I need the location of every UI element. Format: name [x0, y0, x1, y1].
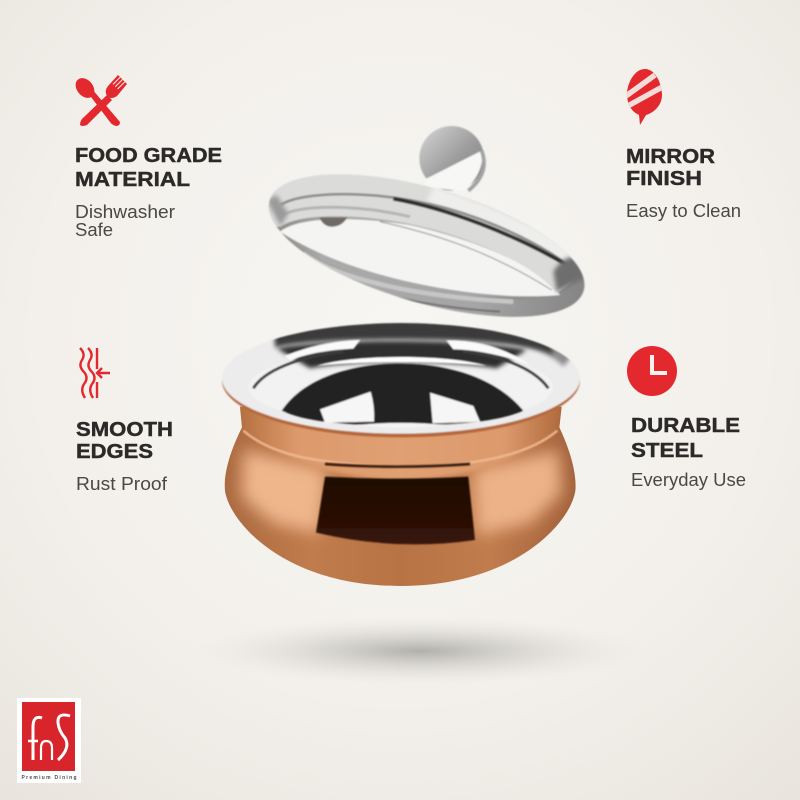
logo tagline: Premium Dining [22, 775, 76, 781]
floor shadow [195, 617, 645, 685]
icon: clock [627, 346, 677, 396]
icon: mirror balloon [626, 69, 664, 125]
text: rust proof: Rust Proof [76, 474, 168, 494]
heading: mirror finish: FINISH [626, 167, 702, 190]
heading: smooth edges [76, 418, 173, 463]
heading: mirror finish [626, 145, 715, 190]
heading: durable steel: STEEL [631, 439, 703, 462]
lid [268, 125, 586, 318]
heading: smooth edges: EDGES [76, 440, 153, 463]
lid lower rim detail [291, 242, 522, 313]
heading: smooth edges: SMOOTH [76, 418, 173, 441]
lid knob [419, 126, 484, 192]
bowl copper body [220, 403, 580, 590]
text: dishwasher safe [75, 202, 175, 240]
bowl neck band [240, 407, 562, 481]
text: dishwasher safe: Dishwasher [75, 202, 175, 222]
heading: food grade material: FOOD GRADE [75, 144, 222, 167]
heading: food grade material: MATERIAL [75, 168, 190, 191]
lid glass pane [280, 219, 560, 296]
heading: mirror finish: MIRROR [626, 145, 715, 168]
bowl interior [249, 340, 553, 427]
text: dishwasher safe: Safe [75, 220, 113, 240]
logo: fns premium dining [17, 698, 81, 783]
panel: smooth edges [76, 348, 173, 494]
text: everyday use: Everyday Use [631, 470, 746, 490]
bowl rim [222, 313, 580, 437]
panel: mirror finish [626, 69, 741, 221]
panel: durable steel [627, 346, 746, 490]
heading: food grade material [75, 144, 222, 191]
lid outer rim [254, 146, 599, 346]
icon: smooth edge arrow [80, 348, 110, 398]
panel: food grade material [72, 74, 222, 240]
bowl dark reflection [316, 477, 475, 544]
lid upper band [268, 174, 584, 294]
icon: spoon and fork [72, 74, 127, 126]
lid glass rivet [319, 217, 347, 227]
lid parts clipped to rim [268, 174, 584, 313]
heading: durable steel [631, 414, 740, 462]
heading: durable steel: DURABLE [631, 414, 740, 437]
bowl [220, 313, 580, 590]
text: easy to clean: Easy to Clean [626, 201, 741, 221]
logo letters [28, 715, 70, 760]
